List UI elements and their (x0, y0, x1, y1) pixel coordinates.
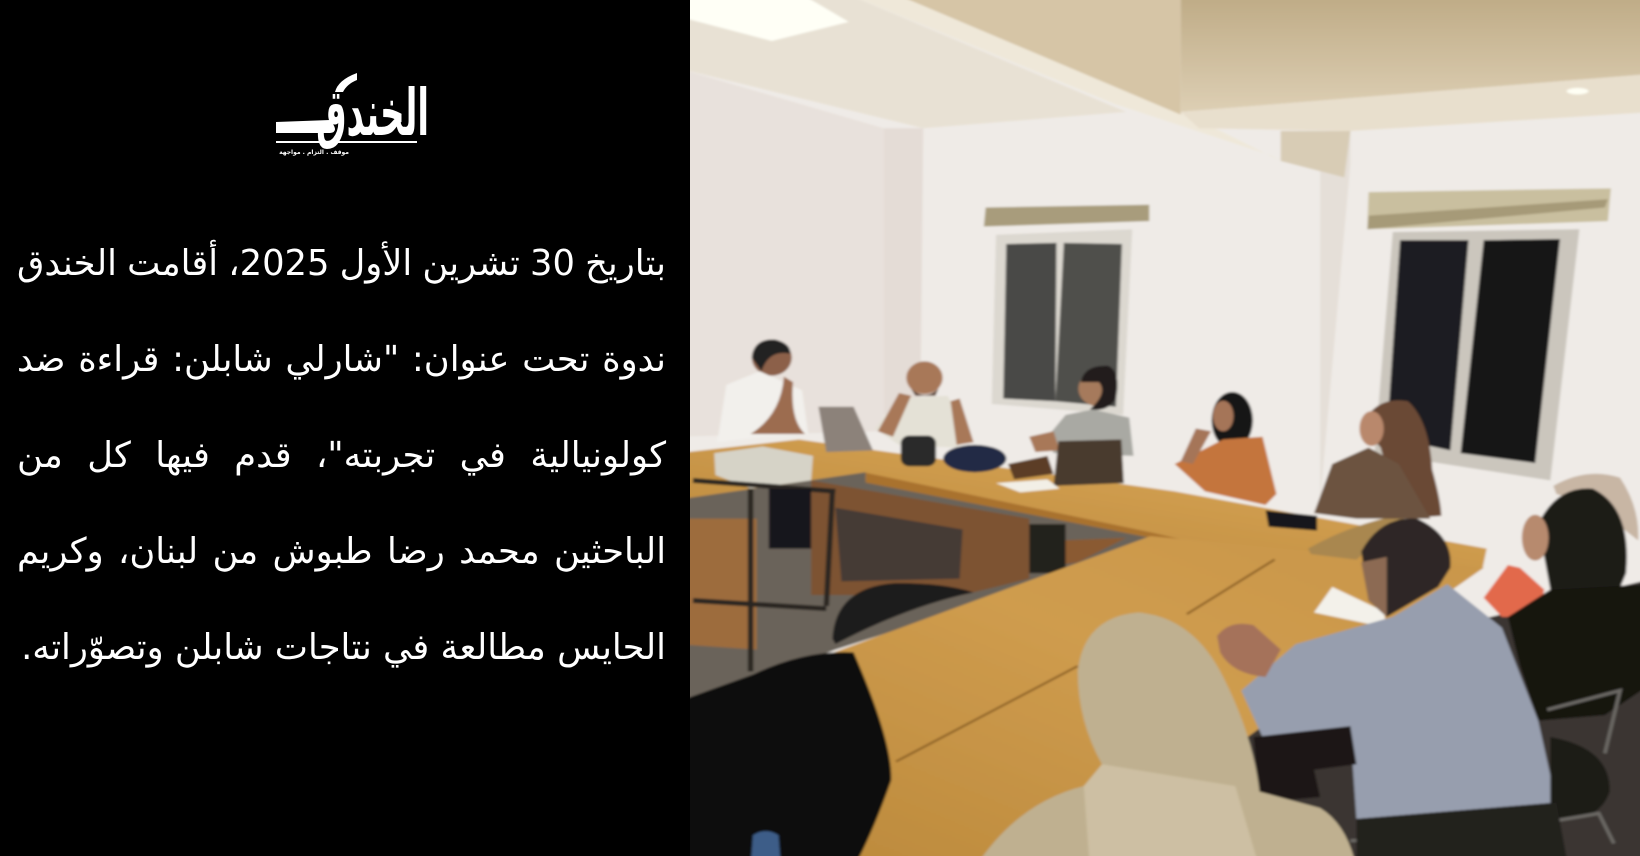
front table (678, 536, 1484, 856)
papers on table (996, 479, 1387, 628)
logo: Al-Khandaq masthead (276, 73, 429, 156)
chair foreground right (1350, 691, 1620, 856)
photo: seminar room with participants around a table (690, 0, 1640, 856)
text block: seminar description: ندوة تحت عنوان: "شارلي شابلن: قراءة ضد (17, 339, 666, 380)
laptop (818, 407, 873, 452)
person: woman in beige hijab (975, 613, 1356, 856)
text block: seminar description: كولونيالية في تجربته"، قدم فيها كل من (17, 435, 666, 476)
person: woman in orange (1175, 392, 1276, 505)
text block: seminar description: الحايس مطالعة في نتاجات شابلن وتصوّراته. (21, 627, 666, 668)
person: man in blue shirt (1217, 518, 1556, 819)
ceiling light panel (678, 0, 849, 41)
chairs (832, 508, 974, 644)
logo: Al-Khandaq masthead: موقف . التزام . مواجهة (279, 149, 349, 156)
backpack foreground (678, 652, 891, 856)
person: man in grey shirt (1029, 366, 1133, 456)
projector on stand (693, 447, 835, 671)
ceiling (678, 0, 1640, 177)
person: man at head of table (717, 340, 811, 549)
person: speaker gesturing (875, 361, 974, 448)
logo: Al-Khandaq masthead: الخندق (316, 76, 429, 151)
panel: black text panel (0, 0, 690, 856)
ceiling spot light (1567, 88, 1589, 94)
person: woman in black with pink sleeve (1484, 488, 1640, 721)
window left (984, 205, 1149, 415)
text block: seminar description: بتاريخ 30 تشرين الأول 2025، أقامت الخندق (17, 243, 666, 284)
bags on table (901, 436, 1411, 560)
floor and drawers (678, 469, 1640, 856)
text block: seminar description: الباحثين محمد رضا طبوش من لبنان، وكريم (17, 531, 666, 572)
water bottle (751, 831, 781, 856)
back table (678, 439, 1487, 569)
text block: seminar description (17, 240, 666, 668)
person: background hijab (1553, 474, 1638, 540)
person: woman with leopard top (1314, 400, 1441, 519)
window right (1367, 188, 1611, 480)
walls (678, 0, 1640, 856)
